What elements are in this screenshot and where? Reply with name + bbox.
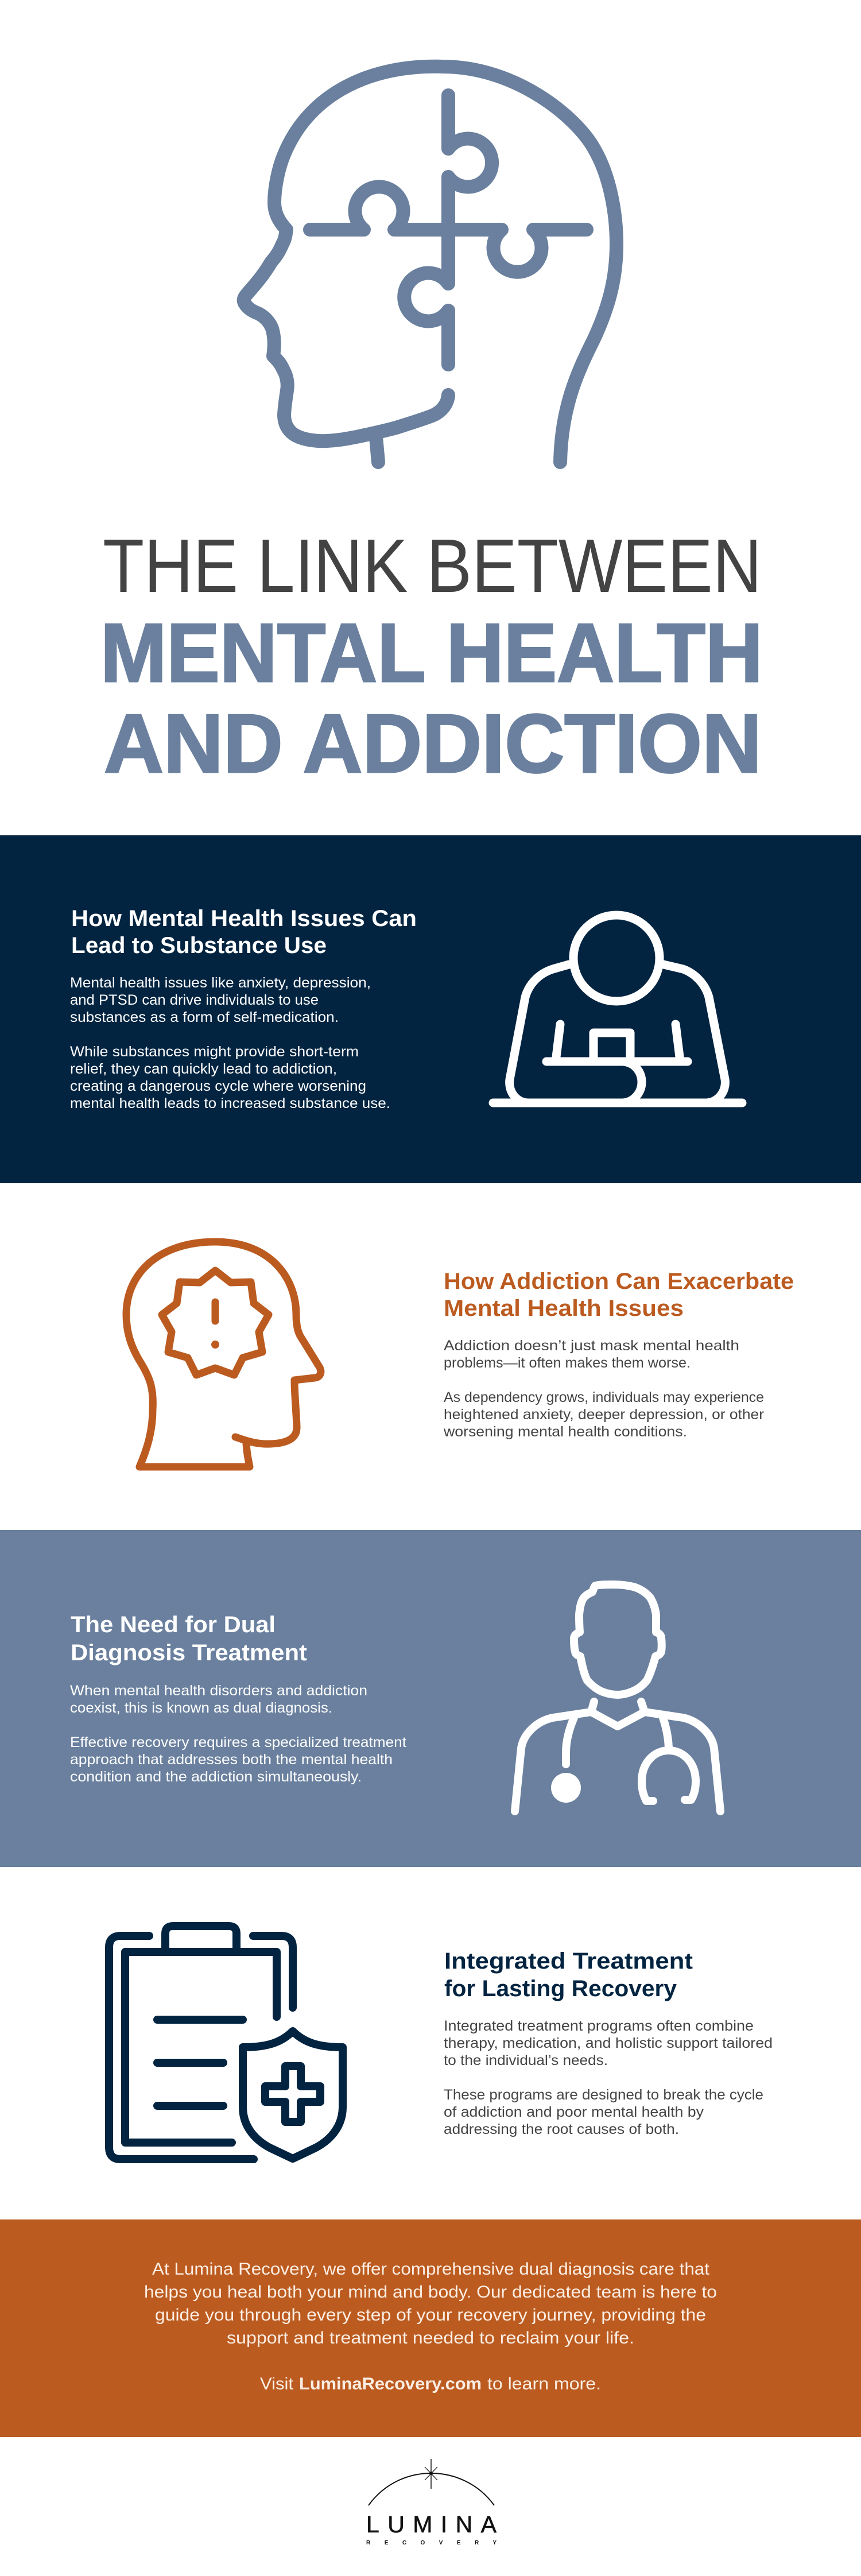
text block: section 3 body: condition and the addiction simultaneously. (70, 1769, 362, 1785)
icon: head with puzzle pieces (244, 67, 616, 462)
logo: Lumina Recovery (366, 2459, 497, 2546)
heading: section 2: How Addiction Can Exacerbate (444, 1269, 794, 1294)
text block: website link line: Visit (260, 2374, 294, 2393)
text block: section 2 body (443, 1338, 764, 1440)
panel: mental health issues lead to substance use (0, 835, 861, 1183)
heading: section 4: for Lasting Recovery (444, 1976, 677, 2001)
heading: section 1: Lead to Substance Use (71, 933, 327, 958)
text block: call to action paragraph (144, 2260, 717, 2348)
text block: section 4 body (444, 2018, 773, 2137)
text block: section 1 body: While substances might provide short-term (70, 1044, 359, 1060)
text block: call to action paragraph: At Lumina Recovery, we offer comprehensive dual diagnosis care that (152, 2260, 710, 2279)
heading: section 2 (444, 1269, 794, 1321)
text block: section 3 body: When mental health disorders and addiction (70, 1683, 367, 1699)
logo mark: arc and star (369, 2459, 494, 2505)
heading: section 2: Mental Health Issues (444, 1296, 684, 1321)
title line 2: MENTAL HEALTH (100, 606, 763, 699)
text block: section 2 body: heightened anxiety, deeper depression, or other (444, 1407, 764, 1423)
text block: section 2 body: Addiction doesn’t just mask mental health (444, 1338, 739, 1354)
logo wordmark: LUMINA (366, 2511, 497, 2538)
text block: section 4 body: of addiction and poor mental health by (444, 2104, 704, 2120)
text block: section 1 body: relief, they can quickly lead to addiction, (70, 1061, 337, 1077)
text block: section 1 body: creating a dangerous cycle where worsening (70, 1078, 366, 1094)
text block: section 1 body: Mental health issues like anxiety, depression, (70, 975, 371, 991)
text block: section 1 body (70, 975, 390, 1111)
text block: website link line: to learn more. (487, 2374, 601, 2393)
text block: section 4 body: Integrated treatment programs often combine (444, 2018, 754, 2034)
icon: person at desk (493, 915, 742, 1103)
text block: call to action paragraph: support and treatment needed to reclaim your life. (227, 2329, 634, 2348)
logo tagline: RECOVERY (366, 2540, 497, 2546)
panel: addiction exacerbates mental health issues (0, 1183, 861, 1530)
text block: website link line: LuminaRecovery.com (299, 2374, 482, 2393)
text block: section 1 body: mental health leads to increased substance use. (70, 1095, 390, 1111)
panel: call to action (0, 2219, 861, 2437)
text block: call to action paragraph: guide you through every step of your recovery journey, providing the (155, 2306, 706, 2325)
text block: section 3 body: coexist, this is known as dual diagnosis. (70, 1700, 332, 1716)
text block: section 3 body: Effective recovery requires a specialized treatment (70, 1734, 406, 1750)
text block: section 2 body: worsening mental health conditions. (443, 1424, 687, 1440)
heading: section 4 (444, 1949, 693, 2001)
title (100, 524, 763, 790)
text block: section 2 body: problems—it often makes them worse. (444, 1355, 691, 1371)
icon: head with alert badge (126, 1242, 321, 1467)
heading: section 3: Diagnosis Treatment (71, 1640, 307, 1665)
text block: section 4 body: to the individual’s needs. (444, 2052, 608, 2068)
text block: section 1 body: substances as a form of self-medication. (70, 1009, 339, 1025)
text block: section 3 body (70, 1683, 406, 1785)
icon: doctor with stethoscope (515, 1585, 720, 1811)
heading: section 1 (71, 906, 417, 958)
text block: call to action paragraph: helps you heal both your mind and body. Our dedicated team is here to (144, 2283, 717, 2302)
heading: section 4: Integrated Treatment (444, 1949, 693, 1974)
text block: section 4 body: These programs are designed to break the cycle (444, 2087, 763, 2103)
title line 1: THE LINK BETWEEN (103, 524, 762, 608)
text block: section 1 body: and PTSD can drive individuals to use (70, 992, 319, 1008)
heading: section 3: The Need for Dual (71, 1612, 276, 1637)
panel: need for dual diagnosis treatment (0, 1530, 861, 1867)
heading: section 3 (71, 1612, 307, 1665)
panel: integrated treatment (0, 1867, 861, 2219)
icon: clipboard with medical shield (109, 1926, 343, 2159)
text block: section 4 body: therapy, medication, and holistic support tailored (444, 2035, 773, 2051)
text block: section 3 body: approach that addresses both the mental health (70, 1752, 393, 1768)
text block: website link line (260, 2374, 601, 2393)
heading: section 1: How Mental Health Issues Can (71, 906, 417, 931)
title line 3: AND ADDICTION (104, 697, 762, 790)
text block: section 2 body: As dependency grows, individuals may experience (444, 1389, 764, 1405)
text block: section 4 body: addressing the root causes of both. (444, 2121, 679, 2137)
